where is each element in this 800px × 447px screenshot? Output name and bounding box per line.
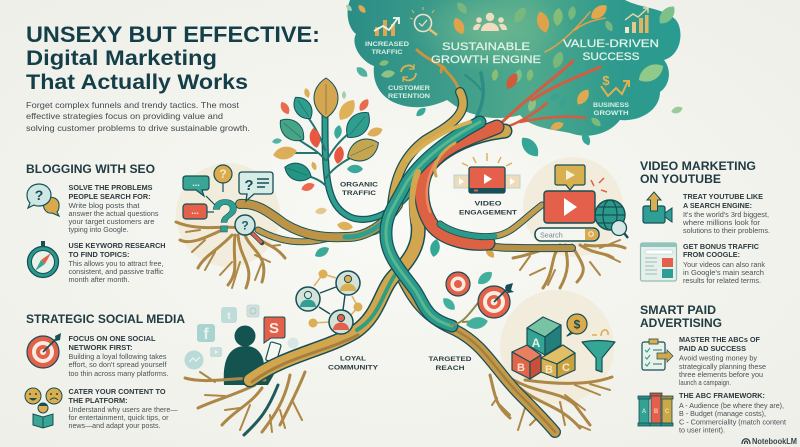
funnel (582, 340, 615, 372)
text: treat youtube: It's the world's 3rd biggest, (683, 212, 769, 219)
text: keyword research: month after month. (68, 277, 130, 284)
text: abc framework: A - Audience (be where they are), (679, 403, 784, 410)
node: gold person (336, 271, 360, 295)
text: master the abcs: MASTER THE ABCs OF (679, 337, 761, 344)
tree trunk (240, 92, 572, 432)
text: focus: too thin across many platforms. (68, 371, 169, 378)
text: solve the problems: SOLVE THE PROBLEMS (68, 185, 153, 192)
canopy labels: VALUE-DRIVEN (563, 38, 659, 50)
text: master the abcs: strategically planning these (679, 364, 766, 371)
text: solve the problems (68, 185, 159, 234)
heading: SMART PAID (640, 305, 716, 317)
canopy labels (365, 38, 659, 117)
text: treat youtube: solutions to their problems. (683, 228, 770, 235)
label: organic traffic: ORGANIC (340, 182, 378, 188)
roots: blogging (176, 222, 285, 288)
side thumbnails (454, 175, 520, 188)
text: focus (68, 336, 169, 378)
rays (462, 153, 512, 166)
node: teal person (296, 287, 320, 311)
canopy labels: BUSINESS (593, 102, 630, 109)
icon: question bubbles: ? (35, 187, 43, 203)
block C: C (562, 362, 570, 374)
strand: targeted reach (395, 262, 555, 432)
illustration: social media (184, 305, 298, 385)
text: keyword research (68, 243, 166, 284)
red S bubble: S (269, 320, 279, 337)
label: organic traffic (340, 182, 378, 197)
search bar: Search (540, 230, 563, 240)
phone (265, 342, 281, 363)
intro text (26, 100, 250, 133)
squiggle (592, 330, 608, 336)
roots: targeted reach (490, 375, 612, 430)
red player (544, 191, 595, 223)
icon: abc columns: C (665, 409, 670, 415)
panel: blogging with SEO (26, 164, 166, 284)
title: Digital Marketing (26, 47, 217, 70)
teal chat bubble: ... (192, 178, 200, 188)
text: cater: CATER YOUR CONTENT TO (68, 389, 166, 396)
panel: video marketing on youtube (640, 161, 770, 285)
text: bonus traffic: GET BONUS TRAFFIC (683, 244, 759, 251)
label: video engagement: VIDEO (474, 200, 502, 208)
label: loyal community (328, 356, 379, 372)
text: solve the problems: typing into Google. (68, 227, 129, 234)
canopy labels: TRAFFIC (372, 49, 403, 56)
canopy labels: RETENTION (388, 93, 430, 100)
canopy labels: GROWTH ENGINE (431, 54, 541, 66)
intro text: solving customer problems to drive sustainable growth. (26, 123, 250, 133)
globe (595, 200, 625, 230)
icon: compass (28, 241, 58, 278)
dollar bubble: $ (574, 318, 581, 332)
gold question circle: ? (219, 167, 227, 181)
text: solve the problems: your target customers are (68, 219, 155, 226)
light question bubble: ? (244, 177, 254, 194)
panel: strategic social media (25, 314, 185, 430)
text: keyword research: This allows you to attract free, (68, 261, 164, 268)
icon: customer retention (401, 64, 416, 82)
big question mark: ? (211, 190, 239, 242)
red rays (591, 178, 607, 192)
faint social icons (184, 305, 298, 370)
heading: ON YOUTUBE (640, 174, 721, 186)
small leaves (272, 87, 384, 260)
person silhouette (224, 326, 281, 385)
canopy labels: GROWTH (594, 110, 629, 117)
text: focus: Building a loyal following takes (68, 354, 167, 361)
icon: magnifier (410, 7, 437, 35)
heading: ADVERTISING (640, 318, 722, 330)
text: master the abcs (679, 337, 766, 387)
text: treat youtube: A SEARCH ENGINE: (683, 203, 752, 210)
label: video engagement (459, 200, 517, 216)
roots: social (185, 372, 305, 435)
node: red person (329, 310, 353, 334)
icon: people (473, 13, 507, 31)
text: focus: NETWORK FIRST: (68, 345, 132, 352)
canopy (348, 0, 680, 136)
text: solve the problems: PEOPLE SEARCH FOR: (68, 194, 150, 201)
icon: browser results (640, 243, 676, 281)
branch: organic traffic (325, 115, 412, 219)
text: abc framework (679, 393, 786, 434)
tree branches (290, 112, 362, 185)
title (26, 22, 320, 94)
tree leaves (275, 78, 383, 185)
illustration: video icon (454, 153, 520, 193)
small target (446, 272, 470, 296)
text: treat youtube: TREAT YOUTUBE LIKE (683, 194, 763, 201)
icon: target (27, 333, 61, 368)
text: focus: effort, so don't spread yourself (68, 362, 167, 369)
text: master the abcs: PAID AD SUCCESS (679, 346, 746, 353)
heading: VIDEO MARKETING (640, 161, 756, 173)
root systems (176, 222, 625, 435)
loose falling leaves (345, 4, 684, 260)
strand: gold outer (392, 92, 463, 205)
text: master the abcs: launch a campaign. (679, 380, 731, 387)
icon: abc columns: B (654, 409, 659, 415)
icon: increased traffic (374, 18, 399, 36)
block C (541, 345, 575, 378)
canopy labels: SUSTAINABLE (442, 41, 530, 53)
text: treat youtube: where millions look for (682, 220, 761, 227)
illustration: community network (296, 270, 362, 334)
faint social icons: t (227, 311, 231, 322)
icon: video camera upload (643, 192, 672, 223)
branch: blogging root (240, 204, 398, 242)
icon: business growth: $ (602, 73, 610, 88)
panel: smart paid advertising (638, 305, 786, 434)
text: abc framework: THE ABC FRAMEWORK: (679, 393, 765, 400)
heading: STRATEGIC SOCIAL MEDIA (26, 314, 185, 326)
text: master the abcs: Avoid westing money by (679, 356, 758, 362)
label: targeted reach: REACH (436, 365, 465, 372)
illustration: ABC blocks (512, 314, 615, 379)
text: keyword research: TO FIND TOPICS: (68, 252, 130, 259)
text: solve the problems: Write blog posts that (68, 203, 140, 210)
text: cater: Understand why users are there— (68, 407, 178, 414)
text: cater: for entertainment, quick tips, or (68, 415, 169, 422)
intro text: effective strategies focus on providing value and (26, 111, 223, 121)
text: bonus traffic: FROM COOGLE: (683, 252, 740, 259)
text: abc framework: to user intent). (679, 428, 725, 434)
title: That Actually Works (26, 71, 248, 94)
canopy branches (417, 12, 605, 133)
canopy labels: INCREASED (365, 41, 409, 48)
organic traffic tree (272, 78, 384, 260)
label: organic traffic: TRAFFIC (342, 190, 376, 197)
text: cater (68, 389, 178, 430)
text: treat youtube (682, 194, 770, 235)
watermark: NotebookLM: NotebookLM (752, 437, 797, 446)
strand: loyal community (250, 131, 505, 382)
text: bonus traffic: in Google's main search (683, 270, 764, 277)
heading (640, 305, 722, 330)
canopy leaves (357, 0, 678, 132)
text: keyword research: USE KEYWORD RESEARCH (68, 243, 166, 250)
text: bonus traffic: results for related terms. (683, 278, 761, 285)
text: cater: THE PLATFORM: (68, 398, 128, 405)
text: keyword research: consistent, and passive traffic (68, 269, 164, 276)
illustration backdrops (176, 157, 623, 404)
illustration: blogging questions (183, 165, 273, 243)
canopy labels: SUCCESS (582, 51, 640, 63)
block B: B (517, 362, 525, 374)
gold play bubble (555, 165, 585, 190)
faint social icons: f (203, 326, 209, 343)
canopy labels: CUSTOMER (388, 85, 430, 92)
illustration: targeted reach (440, 269, 514, 331)
branch: video roots (470, 241, 572, 248)
strand: teal (386, 122, 480, 326)
magnifier (612, 220, 628, 238)
icon: business growth (601, 73, 629, 96)
block C: B (545, 364, 553, 376)
text: solve the problems: answer the actual questions (68, 211, 159, 218)
text: cater: news—and adapt your posts. (68, 423, 161, 430)
label: targeted reach (428, 356, 472, 372)
red chat bubble: ... (191, 206, 199, 216)
video screen (469, 167, 505, 193)
heading: BLOGGING WITH SEO (26, 164, 155, 176)
roots: video (513, 240, 625, 288)
text: abc framework: C - Commerciality (match content (679, 420, 786, 426)
label: loyal community: COMMUNITY (328, 364, 379, 372)
icon: abc columns: A (642, 409, 647, 415)
text: focus: FOCUS ON ONE SOCIAL (68, 336, 156, 343)
intro text: Forget complex funnels and trendy tactics. The most (26, 100, 240, 110)
large target (478, 283, 514, 318)
text: bonus traffic (683, 244, 766, 285)
text: master the abcs: three elements before you (679, 372, 763, 379)
block A: A (532, 336, 541, 350)
strand: upper video branch (440, 205, 542, 237)
strand: red (422, 127, 497, 243)
text: abc framework: B - Budget (manage costs), (679, 411, 766, 418)
icon: faces and reader (25, 388, 62, 428)
icon: value chart (625, 8, 648, 33)
label: targeted reach: TARGETED (428, 356, 472, 363)
title: UNSEXY BUT EFFECTIVE: (26, 22, 320, 47)
label: loyal community: LOYAL (340, 356, 366, 362)
text: bonus traffic: Your videos can also rank (683, 262, 766, 269)
icon: clipboard (642, 339, 673, 370)
icon: abc columns (638, 393, 673, 426)
illustration: youtube (535, 165, 628, 241)
label: video engagement: ENGAGEMENT (459, 210, 517, 216)
strand: gold inner (408, 122, 470, 222)
heading (640, 161, 756, 186)
magnifier: ? (241, 218, 249, 232)
